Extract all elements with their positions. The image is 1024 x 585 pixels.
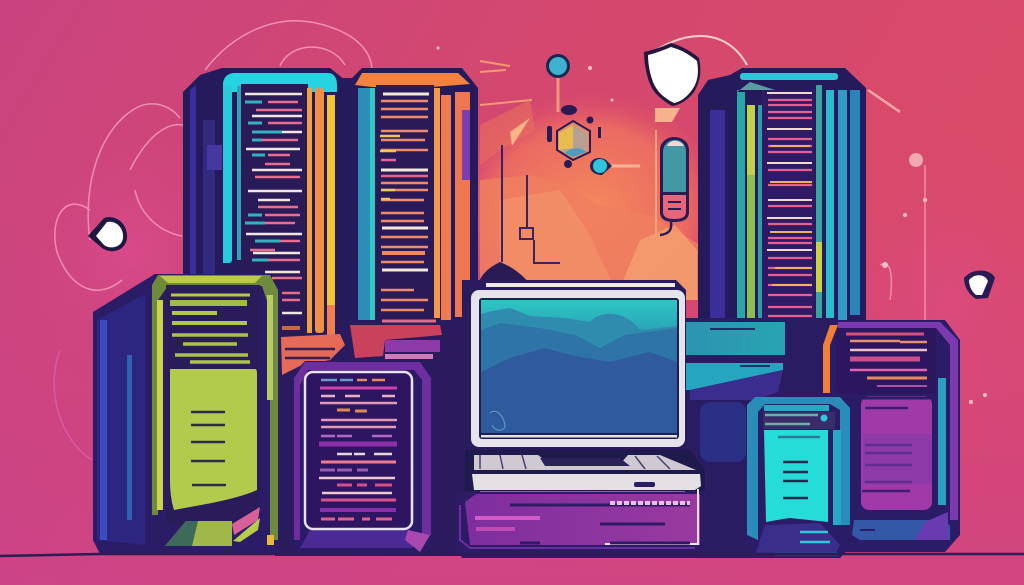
- server tower: left centre: [343, 68, 478, 325]
- server tower: left rear: [183, 68, 345, 340]
- dome behind laptop: [478, 262, 530, 284]
- orange cloud behind centre: [450, 61, 730, 330]
- ground line: [0, 554, 1024, 556]
- server: purple right: [822, 320, 960, 552]
- dark base mass right: [685, 318, 835, 558]
- icon: speech blob right: [964, 270, 995, 299]
- icon: shield: [644, 43, 700, 106]
- laptop purple base unit: [455, 489, 705, 558]
- server: purple tower: [292, 361, 432, 556]
- dark base mass centre: [275, 320, 480, 556]
- laptop: [462, 280, 686, 452]
- icon: small teal node: [590, 158, 640, 175]
- icon: node with connector: [546, 54, 570, 112]
- server: green tower: [93, 274, 280, 554]
- antenna lines: [502, 130, 656, 263]
- decorative curved lines: [54, 21, 925, 460]
- server tower: right rear: [698, 68, 866, 322]
- icon: speech blob left: [88, 217, 127, 251]
- icon: hexagon hub: [547, 105, 601, 168]
- icon: microphone: [660, 137, 689, 235]
- laptop screen: [481, 300, 677, 438]
- keyboard and laptop base: [465, 450, 705, 491]
- teal storage unit: [686, 322, 785, 462]
- stacked drives under left tower: [281, 321, 442, 375]
- server: small teal: [747, 397, 852, 558]
- sparkle dots: [436, 46, 987, 404]
